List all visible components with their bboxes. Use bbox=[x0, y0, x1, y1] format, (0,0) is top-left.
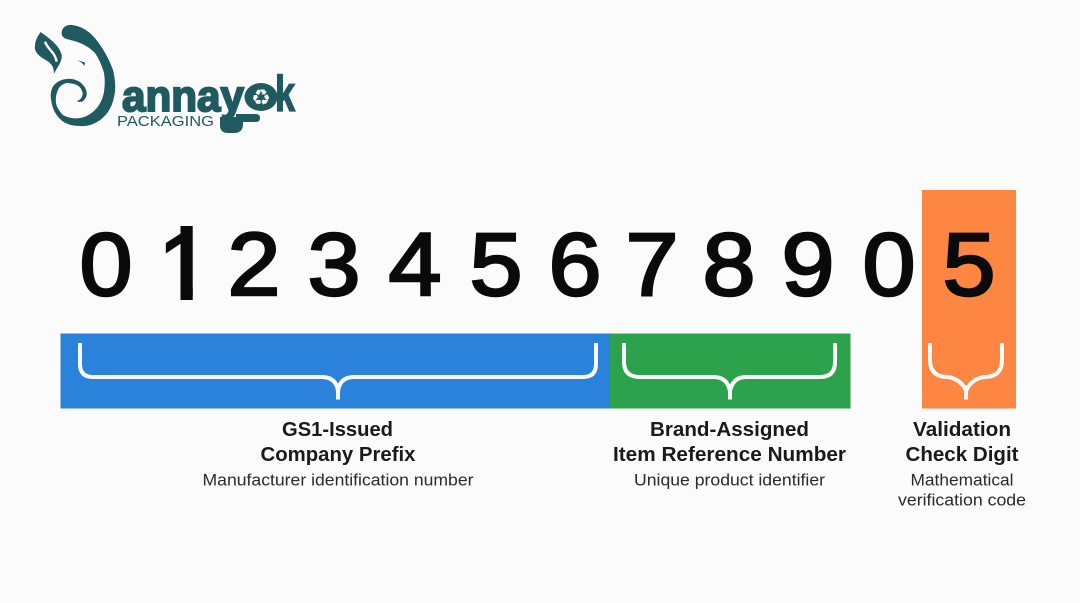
logo: Dannayak Packaging: k bbox=[275, 66, 295, 122]
label: item reference: Unique product identifier bbox=[634, 470, 825, 490]
logo wordmark: annay bbox=[122, 72, 245, 121]
barcode digits: 6 bbox=[548, 214, 602, 314]
label: item reference: Brand-Assigned bbox=[650, 419, 809, 441]
barcode digits: 7 bbox=[626, 214, 678, 314]
blue company prefix bar bbox=[60, 334, 610, 408]
logo descender bbox=[220, 114, 260, 133]
barcode digits: 2 bbox=[228, 214, 280, 314]
label: check digit bbox=[898, 419, 1026, 510]
label: check digit: Mathematical bbox=[910, 470, 1014, 490]
brace: check digit bbox=[930, 343, 1002, 400]
label: company prefix: Company Prefix bbox=[260, 444, 416, 466]
label: company prefix: GS1-Issued bbox=[282, 419, 393, 441]
logo: Dannayak Packaging bbox=[35, 25, 295, 133]
barcode digits bbox=[80, 214, 996, 314]
label: check digit: Validation bbox=[913, 419, 1011, 441]
label: check digit: verification code bbox=[898, 490, 1026, 510]
barcode digits: 3 bbox=[308, 214, 360, 314]
logo subtitle: PACKAGING bbox=[117, 114, 214, 130]
green item reference bar bbox=[610, 334, 850, 408]
icon: recycling symbol: ♻ bbox=[251, 86, 271, 111]
barcode digits: 0 bbox=[80, 214, 132, 314]
icon: leaf bbox=[35, 32, 62, 74]
barcode digits: 5 bbox=[470, 214, 522, 314]
icon: elephant eye bbox=[77, 60, 85, 66]
orange check digit column bbox=[922, 190, 1016, 408]
icon: elephant trunk bbox=[51, 25, 115, 126]
label: item reference bbox=[613, 419, 846, 490]
barcode digits: 0 bbox=[862, 214, 916, 314]
label: item reference: Item Reference Number bbox=[613, 444, 846, 466]
brace: item reference bbox=[624, 343, 835, 400]
barcode digits: 5 bbox=[942, 214, 996, 314]
label: company prefix: Manufacturer identification number bbox=[202, 470, 474, 490]
icon: recycling symbol bbox=[244, 83, 278, 111]
label: check digit: Check Digit bbox=[906, 444, 1019, 466]
barcode digits: 8 bbox=[702, 214, 756, 314]
barcode digits: 9 bbox=[782, 214, 834, 314]
barcode digits: 4 bbox=[388, 214, 442, 314]
brace: company prefix bbox=[80, 343, 596, 400]
barcode digits: 1 bbox=[158, 214, 211, 314]
label: company prefix bbox=[202, 419, 474, 490]
